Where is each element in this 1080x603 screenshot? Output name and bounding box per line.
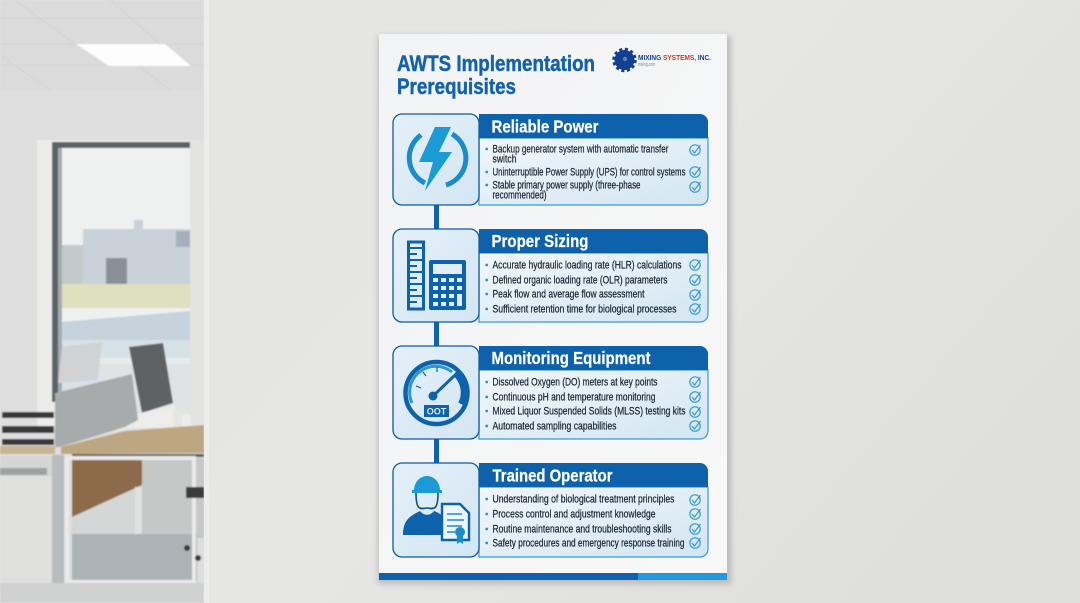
left cabinet bbox=[0, 446, 64, 583]
checklist: Defined organic loading rate (OLR) parameters bbox=[492, 274, 668, 286]
title: AWTS Implementation bbox=[397, 51, 595, 76]
ceiling light bbox=[76, 44, 191, 66]
heading: Proper Sizing bbox=[492, 231, 588, 251]
header bar bbox=[479, 346, 708, 370]
icon tile: gauge bbox=[393, 346, 479, 439]
panel: Trained Operator bbox=[393, 463, 708, 557]
floor bbox=[0, 583, 204, 603]
icon: gear bbox=[614, 50, 635, 70]
checklist: switch bbox=[492, 154, 516, 166]
logo text bbox=[638, 53, 711, 68]
check icons bbox=[690, 377, 700, 431]
connector lines bbox=[434, 205, 439, 463]
checklist: Sufficient retention time for biological processes bbox=[492, 304, 677, 316]
office chair bbox=[184, 487, 204, 561]
title bbox=[397, 51, 595, 99]
monitor bbox=[126, 343, 175, 435]
heading: Reliable Power bbox=[492, 116, 599, 136]
panel: Proper Sizing bbox=[393, 229, 708, 322]
checklist bbox=[485, 494, 684, 550]
panel: Reliable Power bbox=[393, 114, 708, 205]
header bar bbox=[479, 463, 708, 487]
window bbox=[37, 140, 204, 430]
panel body bbox=[479, 138, 708, 205]
right desk bbox=[61, 425, 204, 582]
icon tile: operator with certificate bbox=[393, 463, 479, 557]
logo text: mixing.com bbox=[638, 62, 655, 68]
background monitor bbox=[58, 342, 102, 383]
checklist: Stable primary power supply (three-phase bbox=[492, 180, 640, 192]
checklist: Understanding of biological treatment principles bbox=[492, 494, 675, 506]
header bar bbox=[479, 114, 708, 138]
wall edge strip bbox=[204, 0, 209, 603]
logo text: MIXING SYSTEMS, INC. bbox=[638, 53, 711, 62]
checklist: Safety procedures and emergency response training bbox=[492, 538, 684, 550]
desk plant and cup bbox=[173, 410, 182, 427]
icon tile: gauge: OOT bbox=[427, 406, 447, 416]
footer bar bbox=[379, 573, 727, 580]
checklist bbox=[485, 376, 686, 432]
icon tile: ruler and calculator bbox=[393, 229, 479, 322]
checklist: recommended) bbox=[492, 190, 547, 202]
check icons bbox=[690, 495, 700, 548]
checklist: Peak flow and average flow assessment bbox=[492, 288, 645, 300]
checklist: Backup generator system with automatic transfer bbox=[492, 144, 669, 156]
checklist: Accurate hydraulic loading rate (HLR) calculations bbox=[492, 260, 682, 272]
checklist: Process control and adjustment knowledge bbox=[492, 508, 656, 520]
checklist bbox=[485, 260, 682, 316]
checklist: Continuous pH and temperature monitoring bbox=[492, 392, 656, 404]
heading: Monitoring Equipment bbox=[492, 348, 651, 368]
logo: Mixing Systems, Inc. bbox=[614, 50, 711, 70]
ceiling bbox=[0, 0, 204, 90]
poster shadow bbox=[378, 36, 731, 584]
panel body bbox=[479, 253, 708, 322]
poster bbox=[379, 34, 727, 580]
checklist bbox=[485, 144, 686, 202]
check icons bbox=[690, 260, 700, 314]
header bar bbox=[479, 229, 708, 253]
panel: Monitoring Equipment bbox=[393, 346, 708, 439]
heading: Trained Operator bbox=[492, 466, 613, 486]
office photo: left side bbox=[0, 0, 204, 603]
checklist: Mixed Liquor Suspended Solids (MLSS) testing kits bbox=[492, 406, 686, 418]
paper trays bbox=[2, 412, 54, 445]
checklist: Automated sampling capabilities bbox=[492, 420, 617, 432]
title: Prerequisites bbox=[397, 74, 516, 99]
checklist: Dissolved Oxygen (DO) meters at key points bbox=[492, 376, 658, 388]
icon tile: lightning in power ring bbox=[393, 114, 479, 205]
check icons bbox=[690, 145, 700, 192]
panel body bbox=[479, 487, 708, 557]
checklist: Uninterruptible Power Supply (UPS) for control systems bbox=[492, 166, 686, 178]
desk divider bbox=[55, 374, 138, 447]
panel body bbox=[479, 370, 708, 439]
checklist: Routine maintenance and troubleshooting skills bbox=[492, 524, 672, 536]
